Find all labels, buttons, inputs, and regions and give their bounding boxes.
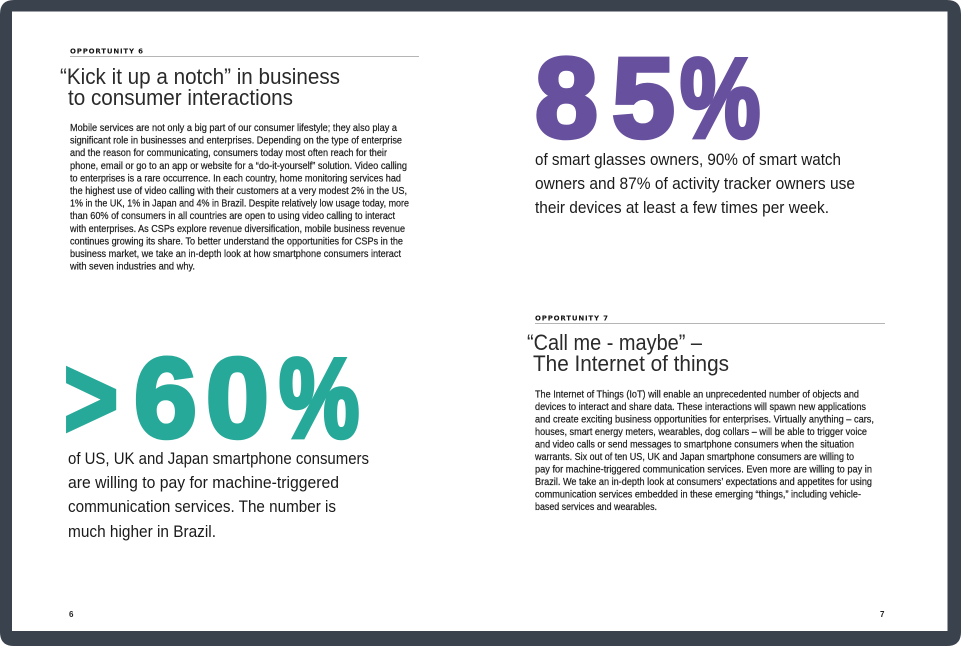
- page number 7: 7: [880, 610, 885, 619]
- label: opportunity 6: OPPORTUNITY 6: [70, 48, 143, 56]
- text block: opportunity 7 body: and video calls or send messages to smartphone consumers when the situation: [535, 440, 854, 450]
- text block: opportunity 6 body: the highest use of video calling with their customers at a very modest 2% in the US,: [70, 186, 407, 197]
- heading: opportunity 7: [527, 330, 729, 376]
- text block: >60% description: are willing to pay for machine-triggered: [68, 474, 339, 492]
- text block: 85% description: [535, 151, 855, 217]
- text block: opportunity 7 body: based services and wearables.: [535, 502, 657, 513]
- page number 6: 6: [69, 610, 74, 619]
- text block: opportunity 6 body: Mobile services are not only a big part of our consumer lifestyle; they also play a: [70, 123, 397, 134]
- text block: opportunity 6 body: phone, email or go to an app or website for a “do-it-yourself” solution. Video calling: [70, 161, 407, 172]
- panel: 85% statistic: [535, 34, 855, 217]
- text block: opportunity 7 body: pay for machine-triggered communication services. Even more are willing to pay in: [535, 464, 872, 476]
- text block: opportunity 7 body: The Internet of Things (IoT) will enable an unprecedented number of objects and: [535, 390, 859, 400]
- big number: 85%: 85: [535, 35, 675, 161]
- text block: opportunity 6 body: to enterprises is a rare occurrence. In each country, home monitoring services had: [70, 173, 401, 184]
- big number: >60%: 60: [134, 335, 269, 461]
- heading: opportunity 7: “Call me - maybe” –: [527, 330, 703, 355]
- text block: opportunity 6 body: and the reason for communicating, consumers today most often reach for their: [70, 148, 388, 159]
- text block: opportunity 7 body: devices to interact and share data. These interactions will spawn new applications: [535, 402, 866, 413]
- text block: opportunity 6 body: 1% in the UK, 1% in Japan and 4% in Brazil. Despite relatively low usage today, more: [70, 199, 409, 210]
- text block: >60% description: much higher in Brazil.: [68, 523, 216, 541]
- text block: opportunity 6 body: significant role in businesses and enterprises. Depending on the type of enterprise: [70, 136, 402, 147]
- heading: opportunity 7: The Internet of things: [533, 351, 729, 376]
- heading: opportunity 6: to consumer interactions: [68, 85, 293, 110]
- heading: opportunity 6: [60, 64, 340, 110]
- big number: 85%: %: [680, 34, 760, 161]
- panel: opportunity 6: [60, 48, 419, 273]
- big number: 85%: [535, 34, 760, 161]
- text block: opportunity 6 body: with seven industries and why.: [69, 262, 195, 273]
- big number: >60%: >: [64, 334, 118, 461]
- text block: opportunity 7 body: [534, 390, 874, 513]
- text block: opportunity 7 body: houses, smart energy meters, wearables, dog collars – will be able to trigger voice: [535, 427, 867, 438]
- text block: >60% description: of US, UK and Japan smartphone consumers: [68, 450, 369, 468]
- text block: opportunity 6 body: than 60% of consumers in all countries are open to using video calling to interact: [70, 211, 395, 222]
- big number: >60%: %: [279, 334, 359, 461]
- label: opportunity 7: OPPORTUNITY 7: [535, 314, 608, 322]
- text block: opportunity 6 body: with enterprises. As CSPs explore revenue diversification, mobile business revenue: [69, 224, 405, 235]
- text block: opportunity 7 body: warrants. Six out of ten US, UK and Japan smartphone consumers are willing to: [534, 452, 854, 463]
- text block: 85% description: owners and 87% of activity tracker owners use: [535, 175, 855, 193]
- text block: >60% description: communication services. The number is: [68, 498, 336, 516]
- big number: >60%: [64, 334, 359, 461]
- text block: opportunity 7 body: Brazil. We take an in-depth look at consumers’ expectations and appetites for using: [535, 477, 872, 488]
- text block: opportunity 6 body: business market, we take an in-depth look at how smartphone consumers interact: [70, 249, 401, 260]
- text block: 85% description: of smart glasses owners, 90% of smart watch: [535, 151, 841, 169]
- text block: >60% description: [68, 450, 369, 541]
- text block: 85% description: their devices at least a few times per week.: [535, 199, 829, 217]
- panel: opportunity 7: [527, 314, 885, 513]
- text block: opportunity 7 body: and create exciting business opportunities for enterprises. Virtually anything – cars,: [535, 414, 874, 426]
- heading: opportunity 6: “Kick it up a notch” in business: [60, 64, 340, 89]
- text block: opportunity 6 body: [69, 123, 409, 273]
- text block: opportunity 7 body: communication services embedded in these emerging “things,” including vehicle-: [535, 490, 861, 500]
- panel: >60% statistic: [64, 334, 369, 541]
- text block: opportunity 6 body: continues growing its share. To better understand the opportunities for CSPs in the: [70, 236, 403, 247]
